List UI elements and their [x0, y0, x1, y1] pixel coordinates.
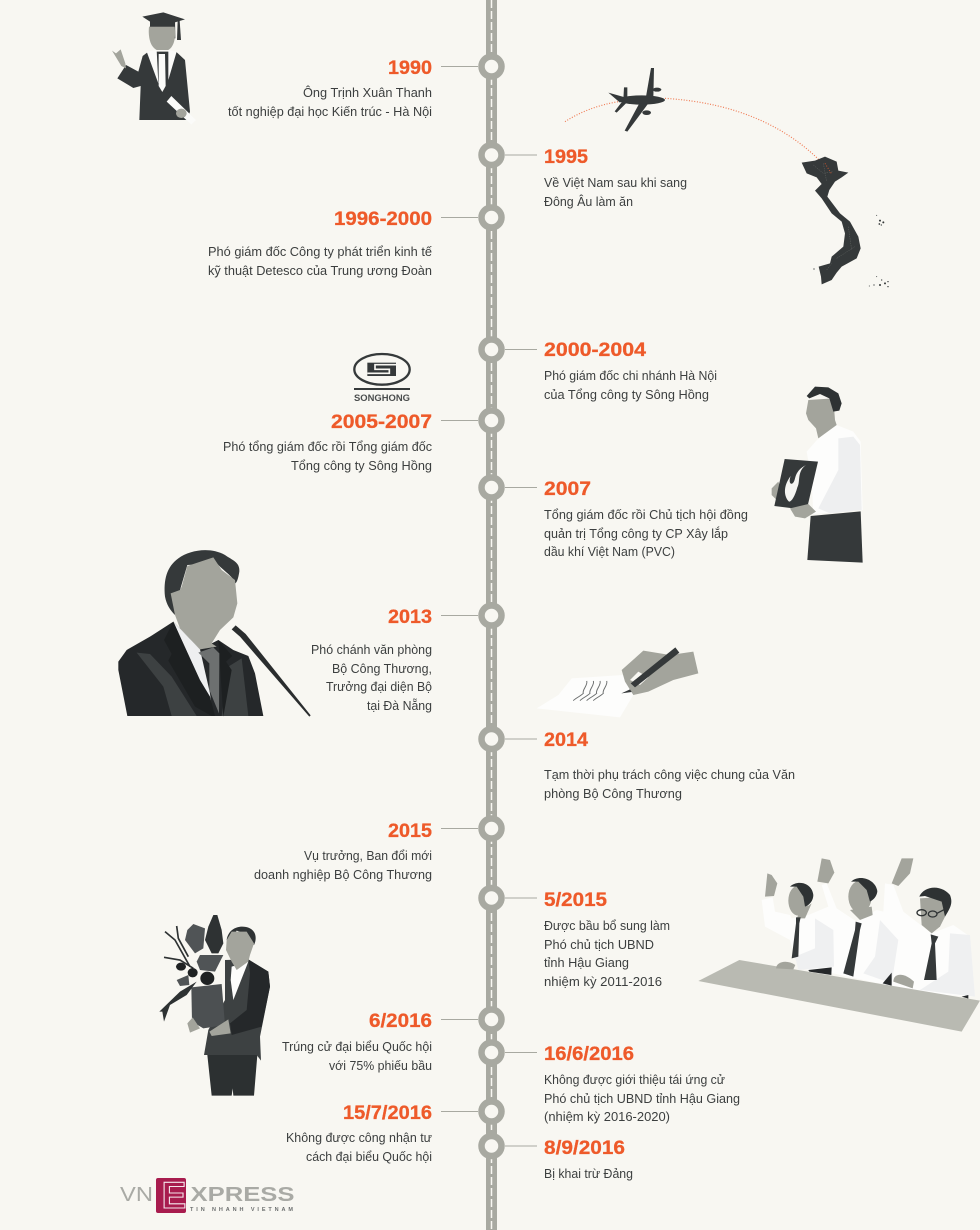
logo: VnExpress: E [162, 1175, 186, 1216]
event 2013 [311, 606, 432, 713]
event 16/6/2016: Phó chủ tịch UBND tỉnh Hậu Giang [544, 1091, 740, 1106]
icon: man holding flower arrangement [159, 915, 270, 1096]
event 1996-2000 [208, 208, 433, 278]
event 15/7/2016: cách đại biểu Quốc hội [306, 1149, 432, 1164]
event 1990: Ông Trịnh Xuân Thanh [303, 85, 432, 100]
event 1996-2000: 1996-2000 [334, 208, 432, 230]
icon: man holding PVC folder [772, 387, 863, 563]
event 6/2016 [282, 1010, 432, 1073]
event 2007: quản trị Tổng công ty CP Xây lắp [544, 526, 728, 541]
event 1995: Về Việt Nam sau khi sang [544, 175, 687, 190]
event 2014: Tạm thời phụ trách công việc chung của Văn [544, 767, 795, 782]
event 16/6/2016: (nhiệm kỳ 2016-2020) [544, 1109, 670, 1124]
event 2007 [544, 478, 748, 559]
event 2007: Tổng giám đốc rồi Chủ tịch hội đồng [544, 507, 748, 522]
event 15/7/2016 [286, 1102, 432, 1164]
event 2015: 2015 [388, 820, 432, 842]
event 8/9/2016 [544, 1137, 633, 1181]
event 16/6/2016 [544, 1043, 740, 1124]
event 2005-2007: Tổng công ty Sông Hồng [291, 458, 432, 473]
event 1995: Đông Âu làm ăn [544, 194, 633, 209]
event 2013: Phó chánh văn phòng [311, 642, 432, 657]
event 15/7/2016: Không được công nhận tư [286, 1130, 432, 1145]
event 2007: 2007 [544, 478, 591, 500]
event 8/9/2016: 8/9/2016 [544, 1137, 625, 1159]
event 2005-2007 [223, 411, 432, 473]
logo: VnExpress [120, 1175, 294, 1216]
event 2013: 2013 [388, 606, 432, 628]
event 2015 [254, 820, 432, 882]
event 15/7/2016: 15/7/2016 [343, 1102, 432, 1124]
event 2007: dầu khí Việt Nam (PVC) [544, 544, 675, 559]
event 2005-2007: 2005-2007 [331, 411, 432, 433]
logo: VnExpress: XPRESS [190, 1184, 294, 1206]
event 2005-2007: Phó tổng giám đốc rồi Tổng giám đốc [223, 439, 432, 454]
event 5/2015: 5/2015 [544, 889, 607, 911]
event 2013: Bộ Công Thương, [332, 661, 432, 676]
event 6/2016: 6/2016 [369, 1010, 432, 1032]
event 6/2016: với 75% phiếu bầu [329, 1058, 432, 1073]
event 2015: doanh nghiệp Bộ Công Thương [254, 867, 432, 882]
event 5/2015: nhiệm kỳ 2011-2016 [544, 974, 662, 989]
event 2013: Trưởng đại diện Bộ [326, 679, 432, 694]
icon: hand signing document [537, 647, 698, 717]
logo: Song Hong: SONGHONG [354, 393, 410, 403]
event 1990: 1990 [388, 57, 432, 79]
event 2014: 2014 [544, 729, 588, 751]
event 2000-2004 [544, 339, 717, 402]
event 2000-2004: 2000-2004 [544, 339, 646, 361]
event 5/2015: Phó chủ tịch UBND [544, 937, 654, 952]
icon: speaker at microphone [118, 550, 311, 717]
event 1995 [544, 146, 687, 209]
event 1996-2000: Phó giám đốc Công ty phát triển kinh tế [208, 244, 433, 259]
event 16/6/2016: Không được giới thiệu tái ứng cử [544, 1072, 725, 1087]
event 2000-2004: của Tổng công ty Sông Hồng [544, 387, 709, 402]
event 8/9/2016: Bị khai trừ Đảng [544, 1166, 633, 1181]
timeline road [441, 0, 537, 1230]
icon: map of Vietnam [802, 157, 889, 287]
event 5/2015: Được bầu bổ sung làm [544, 918, 670, 933]
event 1996-2000: kỹ thuật Detesco của Trung ương Đoàn [208, 263, 432, 278]
icon: flight path and airplane [565, 68, 832, 173]
event 2013: tại Đà Nẵng [367, 698, 432, 713]
logo: Song Hong [354, 354, 410, 403]
event 5/2015: tỉnh Hậu Giang [544, 955, 629, 970]
logo: VnExpress: TIN NHANH VIETNAM [190, 1207, 293, 1213]
event 6/2016: Trúng cử đại biểu Quốc hội [282, 1039, 432, 1054]
event 1995: 1995 [544, 146, 588, 168]
logo: VnExpress: VN [120, 1184, 153, 1206]
event 16/6/2016: 16/6/2016 [544, 1043, 634, 1065]
event 2014: phòng Bộ Công Thương [544, 786, 682, 801]
icon: three men raising hands at a table [698, 858, 980, 1032]
event 5/2015 [544, 889, 670, 989]
event 1990 [228, 57, 432, 119]
event 2014 [544, 729, 795, 801]
event 2000-2004: Phó giám đốc chi nhánh Hà Nội [544, 368, 717, 383]
event 2015: Vụ trưởng, Ban đổi mới [304, 848, 432, 863]
event 1990: tốt nghiệp đại học Kiến trúc - Hà Nội [228, 104, 432, 119]
icon: graduate [112, 12, 196, 125]
